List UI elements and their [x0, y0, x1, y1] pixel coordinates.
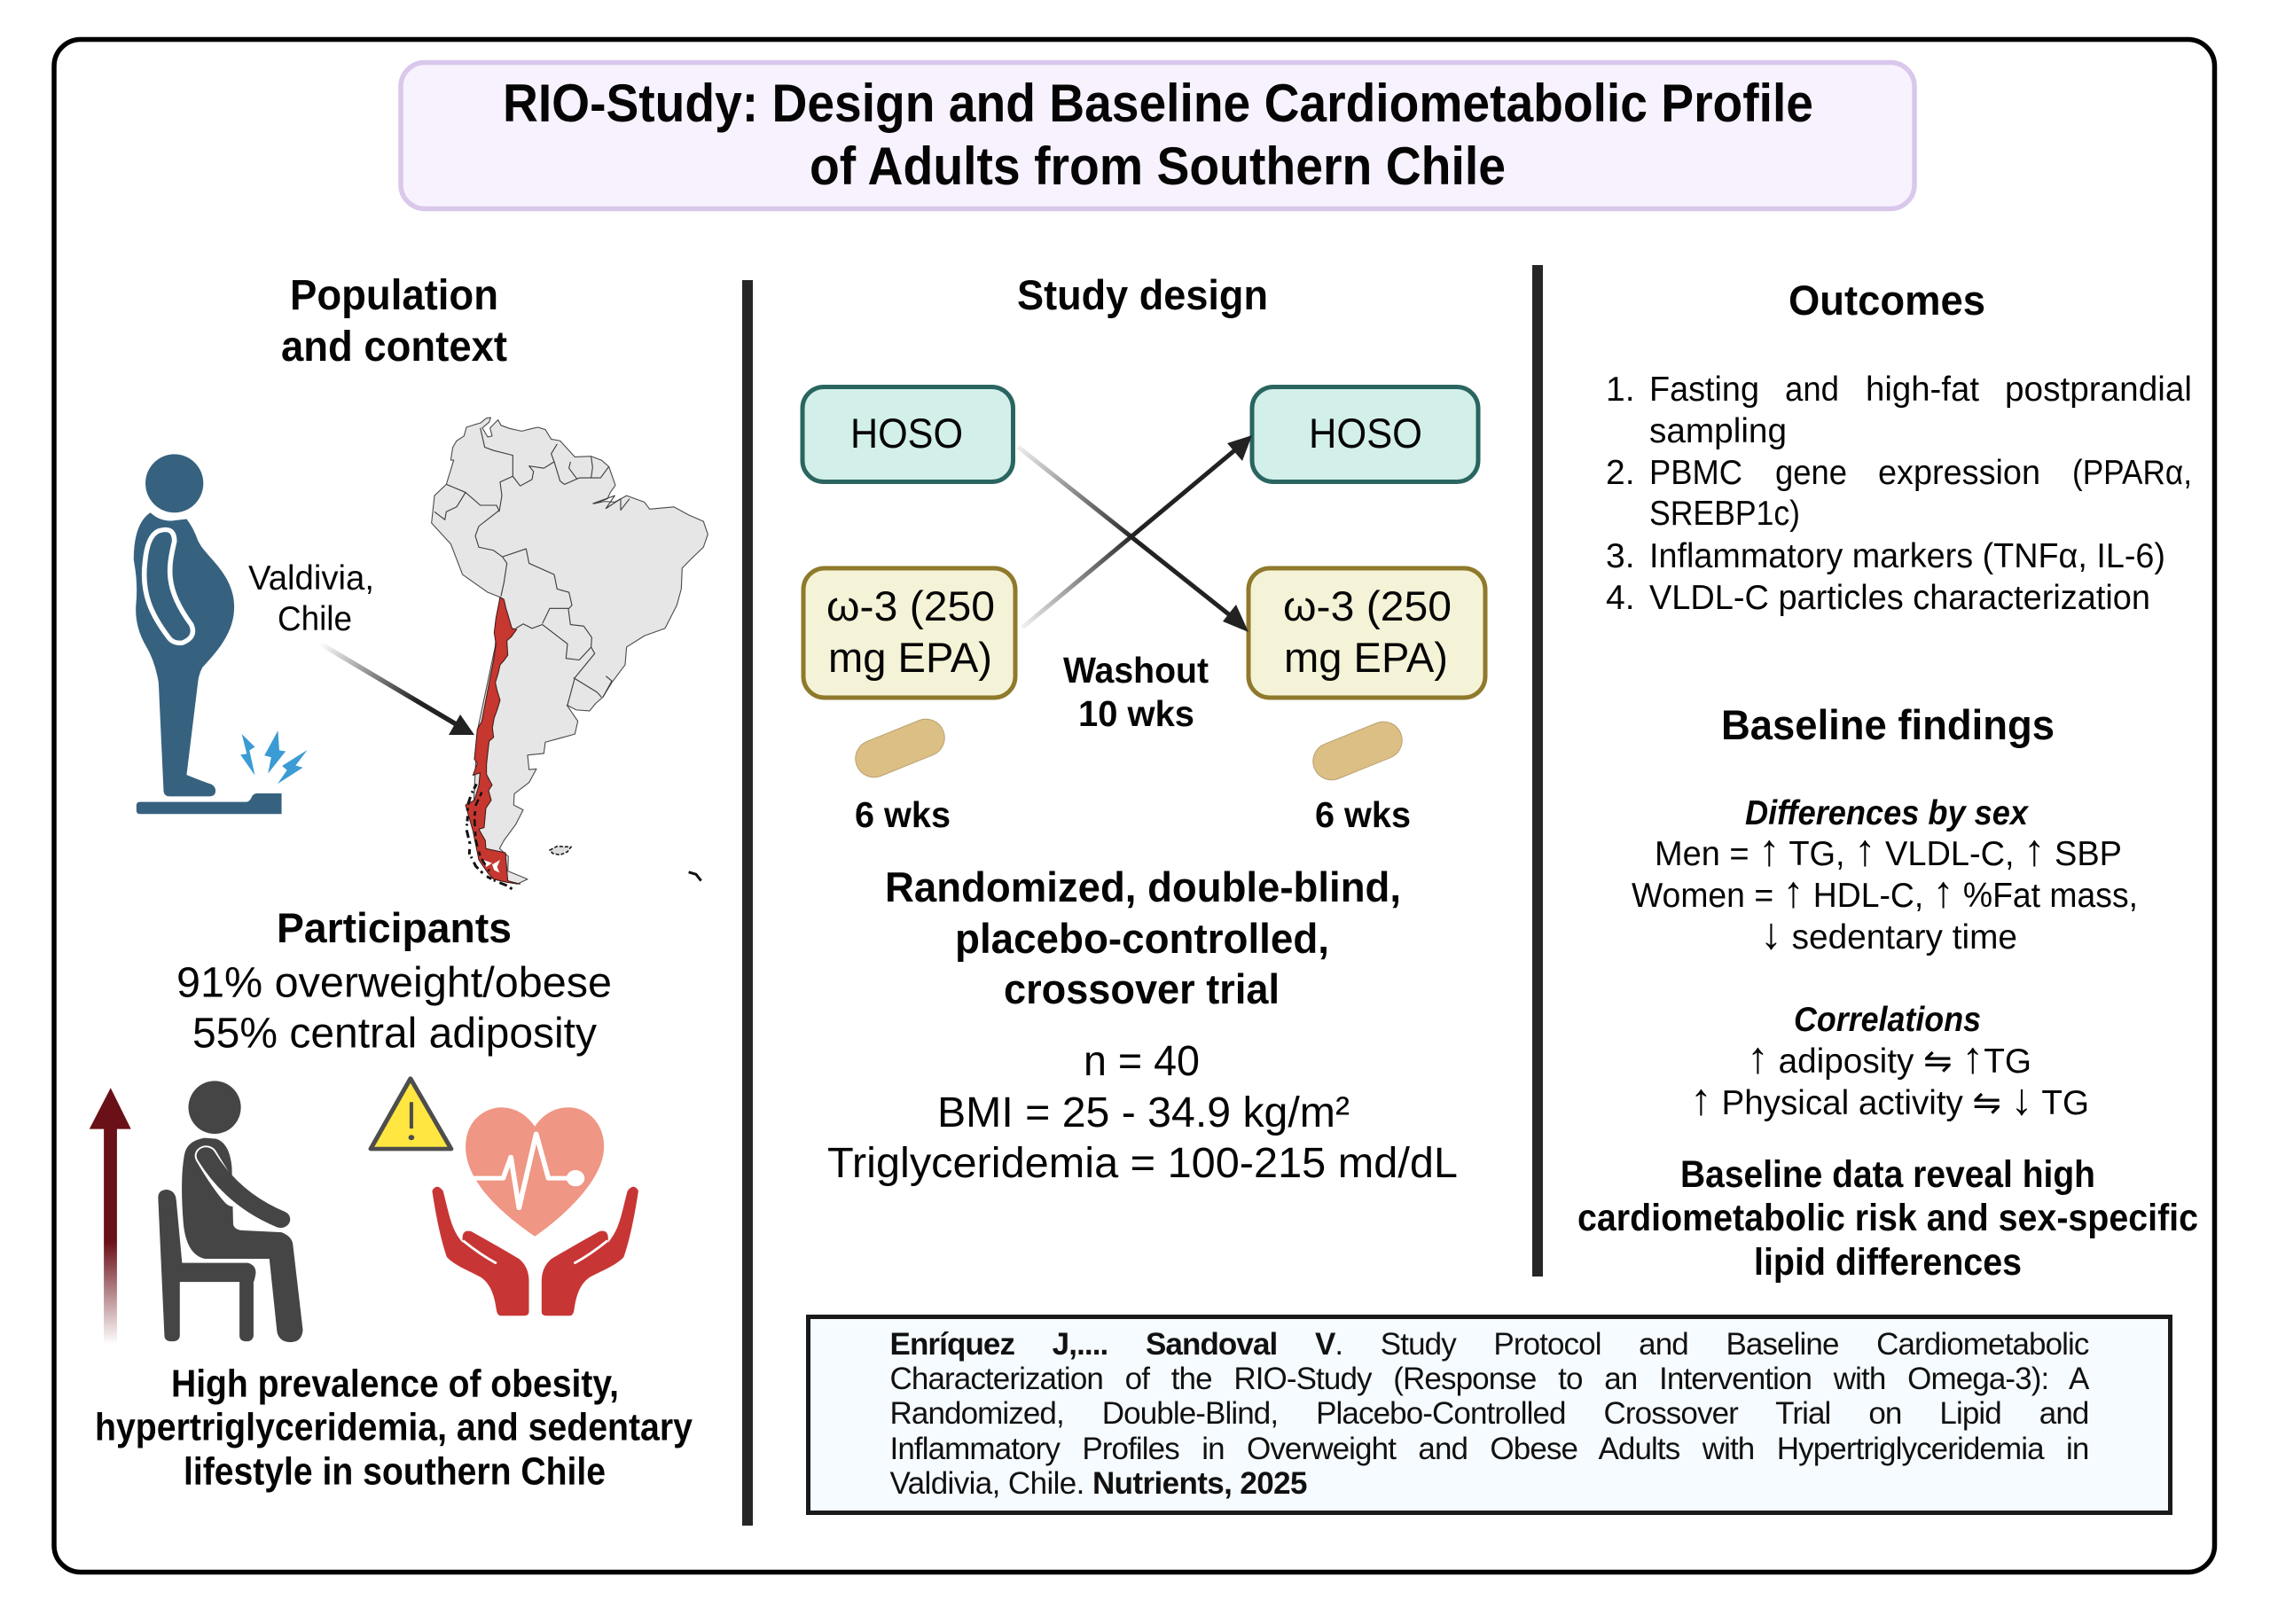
- heading: population and context: [281, 272, 507, 371]
- text: population conclusion: hypertriglyceridemia, and sedentary: [95, 1406, 693, 1448]
- list: outcomes: [1606, 371, 2192, 617]
- text: population conclusion: High prevalence of obesity,: [171, 1362, 619, 1406]
- text: differences by sex: [1632, 794, 2138, 958]
- text: washout: Washout: [1063, 650, 1209, 691]
- list: outcomes: 3.: [1606, 537, 1635, 575]
- box: HOSO second period: [1252, 386, 1478, 482]
- list: outcomes: 2.: [1606, 454, 1635, 492]
- list: outcomes: PBMC: [1649, 454, 1742, 492]
- heading: population and context: and context: [281, 324, 507, 371]
- text: population conclusion: lifestyle in southern Chile: [184, 1450, 606, 1493]
- citation text: Characterization of the RIO-Study (Response to an Intervention with Omega-3): A: [890, 1362, 2089, 1396]
- box: HOSO first period: [802, 386, 1013, 482]
- text: trial type: [885, 863, 1401, 1012]
- text: correlations: [1690, 1001, 2089, 1124]
- text: baseline conclusion: Baseline data reveal high: [1680, 1153, 2095, 1196]
- panel: study design: [802, 271, 1485, 1187]
- list: outcomes: Inflammatory markers (TNFα, IL-6): [1649, 537, 2165, 575]
- icon: person with obesity on a scale: [134, 454, 308, 814]
- panel: outcomes: [1577, 277, 2198, 1284]
- arrow: omega-3 to HOSO: [1022, 435, 1252, 628]
- arrow: HOSO to omega-3: [1018, 447, 1248, 632]
- citation text: Randomized, Double-Blind, Placebo-Controlled Crossover Trial on Lipid and: [890, 1396, 2089, 1431]
- box: omega-3 first period: mg EPA): [828, 634, 992, 681]
- heading: participants: Participants: [277, 904, 512, 951]
- text: inclusion criteria: BMI = 25 - 34.9 kg/m²: [937, 1089, 1350, 1136]
- arrow: rising trend: [90, 1088, 131, 1344]
- heading: population and context: Population: [290, 272, 498, 319]
- list: outcomes: 4.: [1606, 579, 1635, 617]
- list: outcomes: and: [1785, 371, 1839, 409]
- list: outcomes: VLDL-C particles characterization: [1649, 579, 2150, 617]
- text: population conclusion: [95, 1362, 693, 1493]
- text: participant statistics: 55% central adiposity: [192, 1011, 597, 1057]
- list: outcomes: (PPARα,: [2072, 454, 2192, 492]
- title banner: of Adults from Southern Chile: [810, 137, 1506, 196]
- list: outcomes: Fasting: [1649, 371, 1759, 409]
- text: differences by sex: Women = ↑ HDL-C, ↑ %Fat mass,: [1632, 867, 2138, 917]
- map: South America with Chile highlighted: [432, 418, 708, 890]
- text: baseline conclusion: lipid differences: [1754, 1241, 2022, 1284]
- list: outcomes: high-fat: [1866, 371, 1979, 409]
- citation text: Enríquez J,.... Sandoval V. Study Protocol and Baseline Cardiometabolic: [890, 1327, 2089, 1362]
- label: Valdivia, Chile: [248, 559, 374, 638]
- label: Valdivia, Chile: Valdivia,: [248, 559, 374, 597]
- box: omega-3 second period: mg EPA): [1284, 634, 1448, 681]
- text: trial type: placebo-controlled,: [955, 915, 1329, 962]
- text: correlations: ↑ Physical activity ⇋ ↓ TG: [1690, 1074, 2089, 1124]
- text: trial type: Randomized, double-blind,: [885, 863, 1401, 910]
- citation text: Inflammatory Profiles in Overweight and Obese Adults with Hypertriglyceridemia in: [890, 1432, 2089, 1466]
- heading: baseline findings: Baseline findings: [1721, 701, 2055, 748]
- list: outcomes: SREBP1c): [1649, 495, 1800, 533]
- text: 6 weeks second period: 6 wks: [1315, 794, 1411, 835]
- heading: outcomes: Outcomes: [1789, 277, 1985, 324]
- text: participant statistics: [176, 959, 612, 1057]
- label: Valdivia, Chile: Chile: [278, 600, 352, 638]
- list: outcomes: sampling: [1649, 412, 1787, 450]
- box: omega-3 first period: ω-3 (250: [826, 582, 995, 629]
- box: omega-3 second period: [1248, 568, 1485, 698]
- Chile region: [466, 597, 521, 884]
- box: omega-3 first period: [803, 568, 1015, 698]
- text: baseline conclusion: [1577, 1153, 2198, 1284]
- text: differences by sex: Men = ↑ TG, ↑ VLDL-C, ↑ SBP: [1655, 825, 2122, 875]
- box: HOSO second period: HOSO: [1309, 410, 1422, 457]
- text: washout: [1063, 650, 1209, 734]
- list: outcomes: 1.: [1606, 371, 1635, 409]
- panel: population and context: [90, 272, 708, 1493]
- arrow: to Valdivia: [320, 644, 474, 735]
- title banner: [401, 62, 1914, 209]
- title banner: RIO-Study: Design and Baseline Cardiometabolic Profile: [503, 74, 1813, 133]
- text: inclusion criteria: n = 40: [1084, 1038, 1200, 1085]
- text: inclusion criteria: [827, 1038, 1458, 1187]
- icon: heart in hands: [432, 1107, 638, 1316]
- text: baseline conclusion: cardiometabolic risk and sex-specific: [1577, 1197, 2198, 1239]
- text: participant statistics: 91% overweight/obese: [176, 959, 612, 1007]
- citation box: [809, 1317, 2171, 1512]
- text: correlations: Correlations: [1794, 1001, 1981, 1039]
- text: correlations: ↑ adiposity ⇋ ↑TG: [1747, 1033, 2031, 1082]
- icon: sedentary person on chair: [158, 1081, 303, 1342]
- text: differences by sex: ↓ sedentary time: [1760, 909, 2017, 958]
- list: outcomes: postprandial: [2005, 371, 2192, 409]
- heading: study design: Study design: [1017, 271, 1268, 318]
- text: 6 weeks first period: 6 wks: [855, 794, 951, 835]
- text: trial type: crossover trial: [1004, 965, 1280, 1012]
- icon: warning triangle: [371, 1079, 451, 1149]
- list: outcomes: gene: [1775, 454, 1847, 492]
- box: HOSO first period: HOSO: [850, 410, 963, 457]
- text: washout: 10 wks: [1078, 693, 1194, 734]
- box: omega-3 second period: ω-3 (250: [1283, 582, 1452, 629]
- citation text: Valdivia, Chile. Nutrients, 2025: [890, 1466, 1307, 1501]
- icon: capsule first period: [849, 714, 951, 783]
- list: outcomes: expression: [1878, 454, 2040, 492]
- citation text: [890, 1327, 2089, 1501]
- text: inclusion criteria: Triglyceridemia = 100-215 md/dL: [827, 1140, 1458, 1187]
- text: differences by sex: Differences by sex: [1745, 794, 2029, 832]
- icon: capsule second period: [1307, 716, 1408, 785]
